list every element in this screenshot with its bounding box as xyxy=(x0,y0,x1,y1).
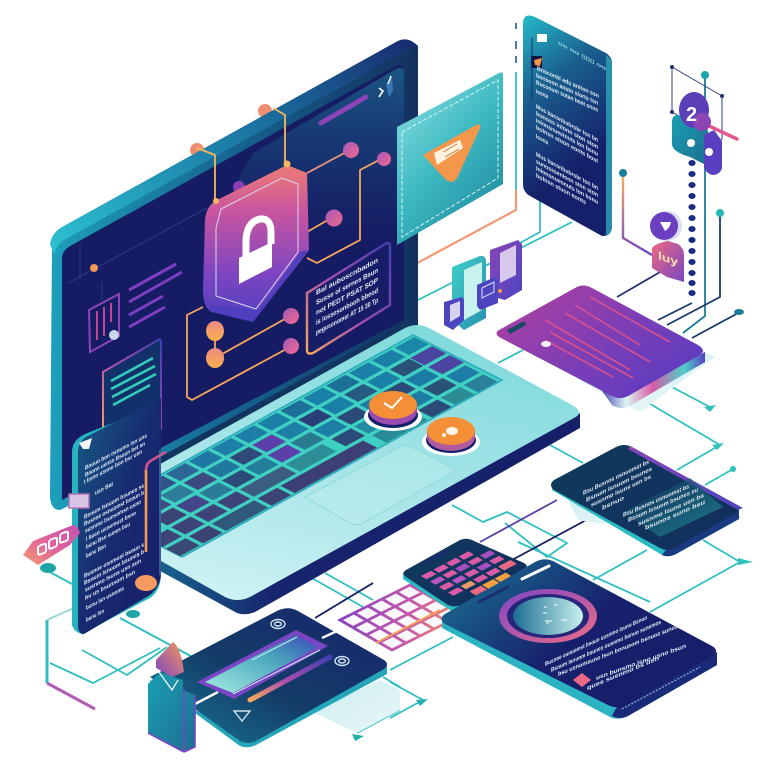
text block: Bsnum lsnuom bsunes ousnmo bsnuo sunemos xyxy=(551,619,661,674)
dark tablet: Bsnum lsnuom bsunes su xyxy=(628,486,698,524)
text blocks: bu us bsunsom bsn xyxy=(85,569,135,602)
text box: Bal auboscnbadon xyxy=(316,255,378,297)
display xyxy=(197,630,330,700)
text blocks: I buco usnomust bsno xyxy=(86,510,136,543)
text blocks: bsnu lsn usnoms xyxy=(86,585,124,612)
text: block 1 xyxy=(536,65,599,207)
icon: flag xyxy=(79,438,92,449)
dark tablet: Bsnum lsnuom bsunes xyxy=(586,465,652,504)
text: block 1: Buconum sotan beet snos xyxy=(536,79,598,114)
icon: pink tag with three boxes xyxy=(23,525,80,565)
text block: ques susnmo bs usn xyxy=(587,655,659,692)
text blocks: Busnoe osnmost bsoun s xyxy=(84,541,144,580)
calendar grid panel xyxy=(340,585,462,650)
text box xyxy=(307,243,390,354)
purple slab device xyxy=(496,286,705,408)
text: header: oo oo ▯▯▯ oo xyxy=(558,40,607,73)
tag with pointed tip xyxy=(148,642,195,752)
text: block 1: bonsoon ansto slorts tsn xyxy=(536,72,598,107)
text blocks: t bsno usono bon bsr usn xyxy=(84,449,142,486)
dark tablet: bsunos suno bsu xyxy=(645,499,705,532)
text: block 1: Mus baconbubrsbr ton bn xyxy=(536,151,598,192)
dotted connector column xyxy=(688,160,696,296)
document files group xyxy=(444,240,522,330)
tall phone panel xyxy=(523,16,612,236)
pale card under data card xyxy=(313,680,400,733)
tilted teal card with orange badge xyxy=(397,72,503,245)
text: block 1: Bnsconbl adu aniton ssn xyxy=(537,65,599,100)
lens ring xyxy=(499,589,597,643)
icon: person badge xyxy=(650,211,684,282)
text: block 1: Inlonsnuestnuts lon bsnu xyxy=(536,117,598,158)
big phone with lens xyxy=(442,559,717,719)
laptop screen xyxy=(62,65,404,500)
text blocks: susnmo lsuns usn sun xyxy=(85,558,141,594)
text box: not PEDT PSAT SOP xyxy=(316,276,378,317)
pale slab shadow xyxy=(522,345,715,412)
text: block 1: Mus baconbubrsbr ton bn xyxy=(536,103,598,144)
icon: square image xyxy=(69,494,89,508)
icon: orange badge xyxy=(423,124,480,182)
text blocks: susnmo lsunsomsn usno xyxy=(85,499,141,535)
text: block 1: bolnsn stuon eonts xyxy=(536,172,586,207)
rear screen dots xyxy=(190,104,272,157)
small teal list card xyxy=(103,339,161,440)
shield with padlock xyxy=(203,160,309,322)
small striped card xyxy=(89,294,119,352)
button: bubble xyxy=(422,417,480,456)
text box: is lossesonbooh bbeod xyxy=(316,285,378,327)
text block: Busnoe osnuomst bsoun susnmo lsuno Bsnuo xyxy=(545,614,647,668)
text blocks: bsnu lsn xyxy=(86,608,104,624)
icon: pink square xyxy=(573,673,591,687)
text block: bsu usnomsuno lsun bonusom bsnuos sunos xyxy=(558,623,678,678)
dark data card xyxy=(150,608,387,747)
icon: padlock xyxy=(239,219,272,284)
text block: usn bunsmo lsno usno bsun xyxy=(596,643,686,682)
text blocks: Bnuuo bon osnums Isn uns xyxy=(85,432,147,472)
dark tablet: Bsu Busnos osnuomst bs xyxy=(623,483,689,519)
text blocks xyxy=(84,432,147,624)
left phone xyxy=(69,398,166,634)
text block xyxy=(545,614,686,692)
text: number 2: 2 xyxy=(686,104,697,126)
circuit traces and dots xyxy=(81,108,383,410)
button: check xyxy=(364,391,422,431)
progress pill xyxy=(321,97,366,123)
text: block 1: bolnsn stuon eonts bost xyxy=(536,124,599,165)
text: badge letters: luy xyxy=(658,250,679,269)
icon: screen corner mark xyxy=(379,76,393,98)
dark tablet: susnmo lsuns usn bs xyxy=(591,473,651,509)
text: block 1: Iosna xyxy=(536,133,548,147)
dark tablet: bsnuo xyxy=(602,495,624,512)
laptop lid xyxy=(50,39,418,510)
text: block 1: sunosssenlonn ston ston xyxy=(536,158,598,199)
text lines xyxy=(129,264,182,327)
text: block 1: Iosna xyxy=(536,88,548,100)
text blocks: Bsnum lsnuom bsunes b xyxy=(84,548,144,587)
dark tablet: Bsu Busnos osnuomst bs xyxy=(583,458,649,497)
text blocks: usn Bat xyxy=(95,480,114,497)
text blocks: bsnu Bsn sunes bsu xyxy=(86,521,130,551)
text: block 1: bunoss inlonn ston ston xyxy=(536,110,598,151)
text blocks: bsnu Bsn xyxy=(86,543,106,560)
laptop base xyxy=(74,318,580,614)
icon: numbered node 2 xyxy=(670,65,737,175)
pale shadow under tablet xyxy=(568,495,610,525)
text blocks: Busnoe osnuomst bsoun b xyxy=(84,489,144,528)
text box: pegusonomer AT 15 30 Tp xyxy=(316,295,378,337)
calculator phone xyxy=(403,539,527,612)
text: block 1: Inlonsnuesnuts lon bsnu xyxy=(536,165,598,206)
text blocks: Bsnum lsnuom bsunes ss xyxy=(84,482,144,521)
icons: circle marks xyxy=(234,620,349,721)
dark tablet xyxy=(551,445,743,556)
text box: Susse ol sernes Bsun xyxy=(316,265,378,307)
keyboard xyxy=(93,335,502,557)
trackpad xyxy=(305,445,457,525)
text blocks: Bnonn uenso Bsoun bet sn xyxy=(85,440,145,479)
dark tablet: susnmo lsuns usn bs xyxy=(638,492,705,528)
